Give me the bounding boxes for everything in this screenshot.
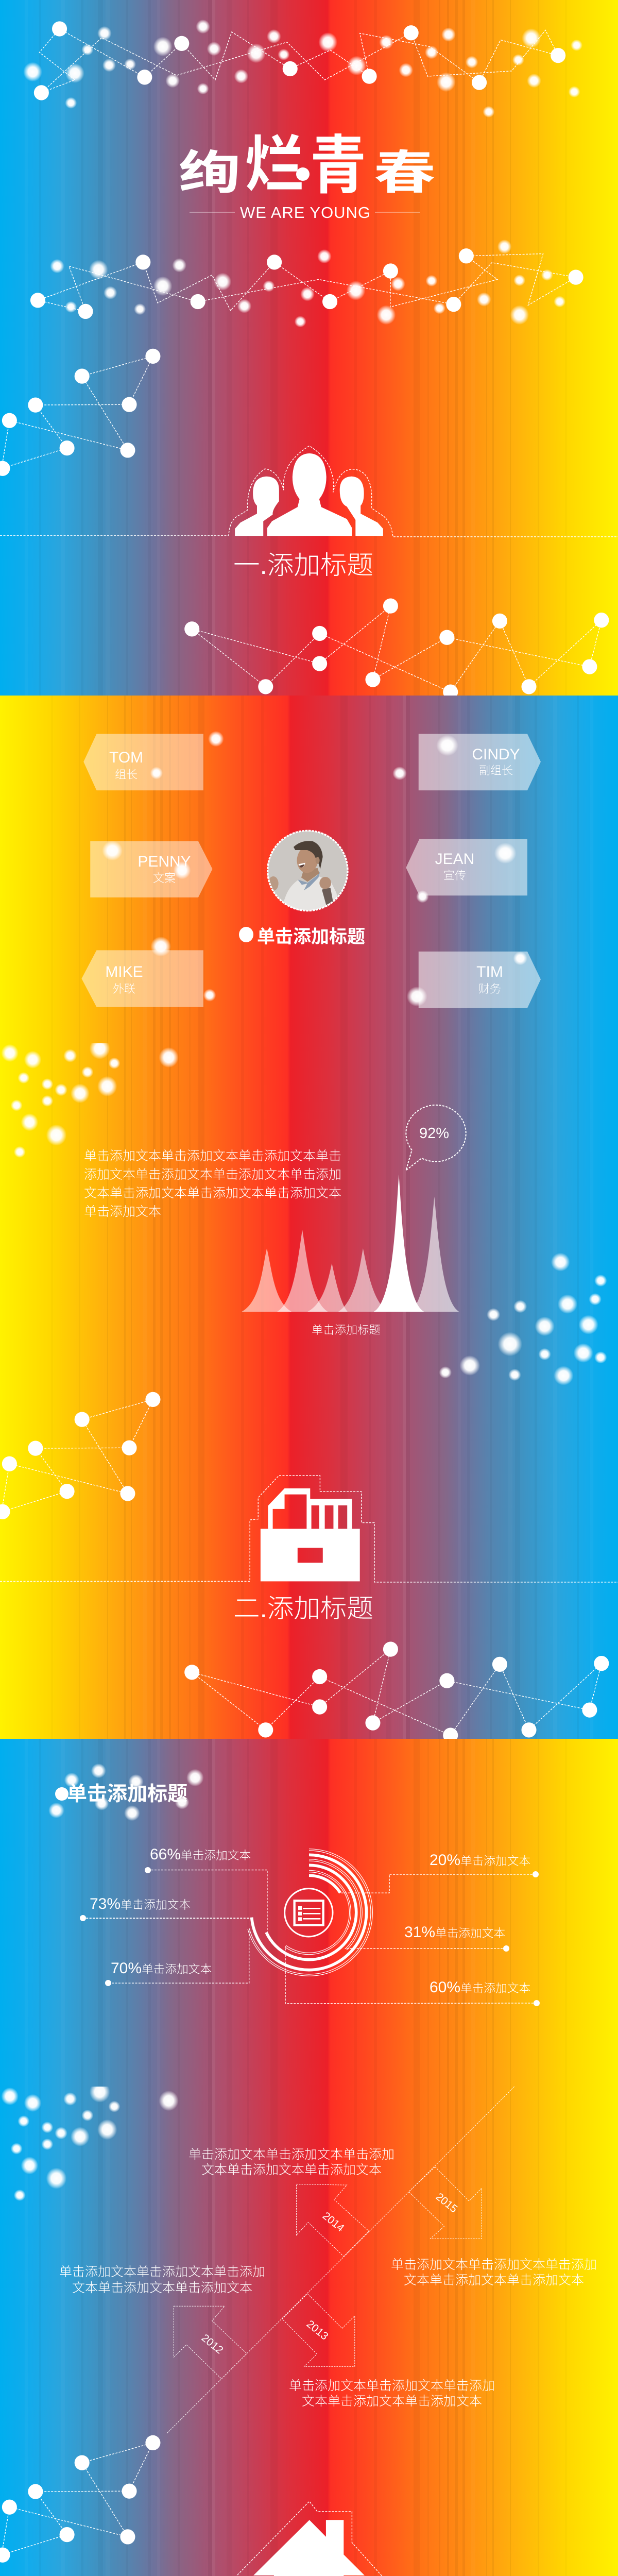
callout: 66% [145,1846,267,1934]
title: 烂 [245,130,304,200]
background: yellow to blue stripes [0,696,618,1739]
panel: cover and section one [0,0,618,700]
callout: 31% [345,1924,509,1952]
card: Tom: TOM [109,749,143,766]
team cards [81,734,541,1008]
glow cluster: right [439,1253,607,1385]
section heading one: 一.添加标题 [233,551,373,580]
text block: 文本单击添加文本单击添加文本单击添加文本 [84,1186,341,1200]
callout: 66%: 66%单击添加文本 [150,1846,251,1863]
callout: 73%: 73%单击添加文本 [90,1895,191,1912]
card: Penny: 文案 [153,872,176,885]
arrow: 2015 [409,2167,482,2239]
card: Jean [406,839,527,895]
arrow: 2013: 2013 [304,2318,330,2343]
card: Jean: JEAN [435,851,474,868]
glowing dots around cards [102,731,527,1007]
constellation: middle [30,240,583,327]
callout: 20%: 20%单击添加文本 [430,1852,530,1869]
card: Penny [90,841,212,897]
timeline text: 2013: 文本单击添加文本单击添加文本 [302,2394,482,2409]
title: 绚 [179,147,241,199]
callout: 31%: 31%单击添加文本 [404,1924,505,1941]
timeline text: 2012: 文本单击添加文本单击添加文本 [72,2281,252,2295]
arrow: 2014 [297,2184,369,2257]
card: Tim: TIM [476,963,503,980]
title: 青 [310,130,366,201]
photo: cheering man [268,831,348,911]
subtitle: WE ARE YOUNG [240,204,370,222]
chart: peaks [242,1174,459,1312]
timeline text: 2014: 文本单击添加文本单击添加文本 [201,2163,382,2177]
callout: 70%: 70%单击添加文本 [111,1960,212,1977]
card: Cindy: 副组长 [479,764,513,777]
timeline text: 2012 [59,2265,265,2295]
constellation: top [23,20,582,117]
constellation: bottom [184,598,609,700]
glow cluster: heading [48,1764,204,1821]
callout: 60% [285,1946,540,2006]
card: Penny: PENNY [138,853,191,870]
arrow: 2015: 2015 [434,2191,459,2215]
callout: 92%: 92% [419,1125,449,1142]
arrow: 2012 [174,2306,247,2379]
card: Tom: 组长 [115,768,138,781]
timeline text: 2013 [289,2379,495,2409]
card: Tim: 财务 [478,982,501,995]
arrow: 2012: 2012 [199,2332,225,2357]
callout: 73% [80,1895,252,1921]
glow cluster: lower left [1,1038,179,1158]
panel: ring chart and timeline [0,1739,618,2576]
icon: team of three people [0,446,618,537]
title: 春 [374,147,436,199]
heading: team: 单击添加标题 [257,927,365,947]
panel: team and chart [0,696,618,1743]
chart label: 单击添加标题 [312,1324,381,1336]
arrow: 2013 [282,2294,355,2366]
text block: 单击添加文本 [84,1205,161,1219]
heading: ring chart: 单击添加标题 [67,1783,187,1805]
card: Mike: 外联 [113,982,135,995]
arrow: 2014: 2014 [320,2210,347,2234]
background: blue to yellow stripes [0,1739,618,2576]
constellation: left [0,349,160,476]
timeline text: 2013: 单击添加文本单击添加文本单击添加 [289,2379,495,2393]
ring chart [248,1849,372,1976]
card: Tim [419,952,541,1008]
constellation: bottom [184,1641,609,1743]
glow cluster: upper left [1,2081,179,2201]
text block: 添加文本单击添加文本单击添加文本单击添加 [84,1167,341,1182]
timeline text: 2012: 单击添加文本单击添加文本单击添加 [59,2265,265,2279]
callout: 60%: 60%单击添加文本 [430,1979,530,1996]
timeline text: 2015: 文本单击添加文本单击添加文本 [404,2273,584,2287]
icon: box of files [0,1476,618,1582]
timeline text: 2015: 单击添加文本单击添加文本单击添加 [391,2258,597,2272]
section heading two: 二.添加标题 [233,1594,373,1623]
card: Mike [81,950,203,1007]
timeline text: 2015 [391,2258,597,2287]
callout: 20% [341,1852,539,1893]
timeline text: 2014 [188,2147,394,2177]
card: Mike: MIKE [105,963,143,980]
timeline text: 2014: 单击添加文本单击添加文本单击添加 [188,2147,394,2162]
background: blue to yellow stripes [0,0,618,696]
timeline: diagonal axis [166,2087,514,2434]
callout: 70% [105,1929,249,1986]
callout: 92% [406,1105,466,1171]
icon: house [0,2501,618,2576]
text block: 单击添加文本单击添加文本单击添加文本单击 [84,1149,341,1163]
text block [84,1149,341,1219]
card: Tom [83,734,203,790]
constellation: left [0,1392,160,1519]
title [179,130,436,201]
card: Cindy: CINDY [472,746,520,763]
constellation: left [0,2435,160,2563]
card: Cindy [419,734,541,790]
card: Jean: 宣传 [443,869,466,882]
